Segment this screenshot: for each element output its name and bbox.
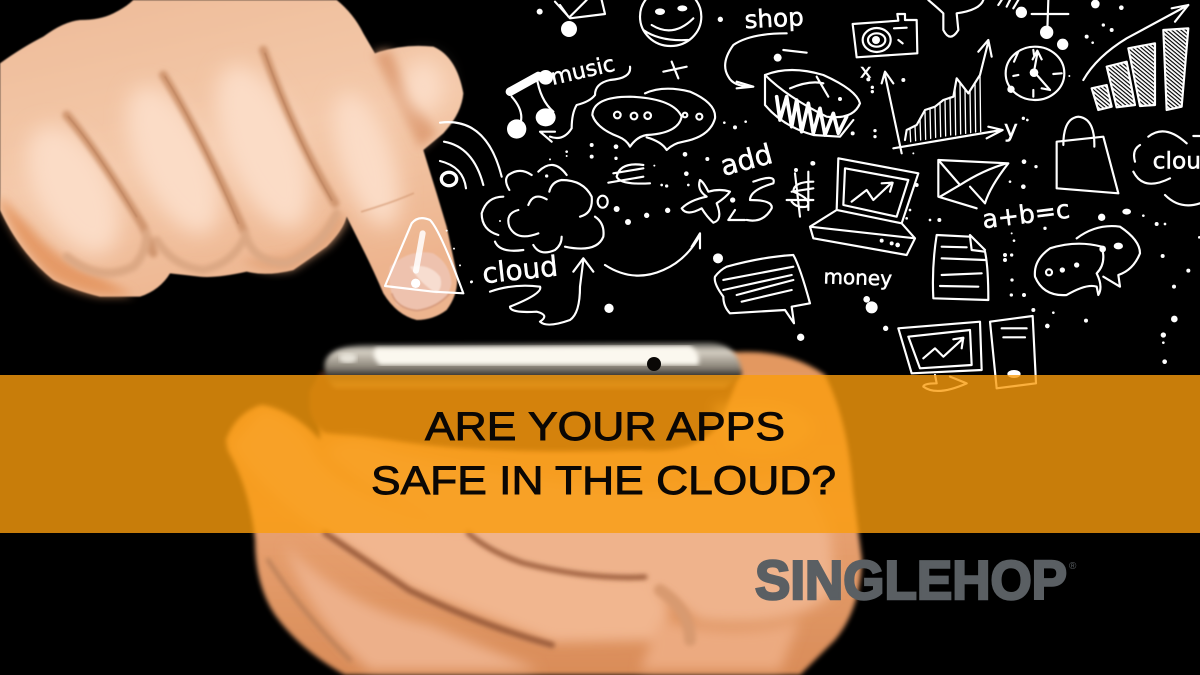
fingernail (389, 252, 452, 311)
doodle: add label: add (717, 137, 776, 183)
doodle: paired bubbles (1035, 226, 1140, 295)
doodle: wifi (440, 122, 502, 188)
doodle: music note (507, 67, 630, 142)
doodle: music label: music (548, 52, 617, 91)
doodle: money label: money (823, 264, 893, 291)
doodle: envelope (938, 160, 1008, 208)
doodle: monitor (898, 322, 982, 391)
doodle: smiley (640, 0, 723, 46)
skin shading: underside tone (0, 50, 437, 295)
doodle: squiggle and dollar (728, 172, 813, 221)
palm tone (232, 410, 835, 670)
skin shading: finger highlights (8, 53, 443, 269)
doodle: wiggle arrow (490, 258, 593, 325)
palm creases (268, 533, 690, 660)
finger highlight behind band (712, 401, 815, 454)
title: SAFE IN THE CLOUD? (371, 459, 836, 503)
phone back shadow (309, 372, 740, 451)
doodle: hatched bowl (765, 54, 860, 137)
phone edge (324, 342, 742, 388)
doodle: top marks and plus (998, 0, 1100, 50)
photo: hand holding phone (226, 342, 862, 675)
logo: SingleHop: SINGLEHOP (755, 549, 1067, 611)
doodle: equation: a+b=c (980, 194, 1071, 234)
doodle: speech bubble with lines (715, 255, 810, 323)
doodle: computer tower (990, 316, 1036, 388)
title: ARE YOUR APPS (425, 405, 785, 449)
logo: SingleHop: ® (1069, 561, 1077, 572)
doodle: plus shape (682, 180, 730, 223)
doodle: right cloud (1133, 131, 1200, 205)
doodle: scattered dots right (811, 5, 1200, 364)
doodle: shopping bag (1057, 117, 1118, 193)
doodle: clock (1006, 47, 1064, 100)
doodle: x label: x (860, 59, 871, 82)
doodle: mail with dot (537, 0, 605, 37)
doodle: camera (853, 14, 917, 57)
orange banner (0, 375, 1200, 533)
doodle: line chart (882, 40, 1003, 153)
doodle: cloud label: cloud (481, 250, 559, 290)
photo: pointing hand (0, 0, 463, 320)
doodle: scattered dots (470, 120, 815, 341)
doodle: y label: y (1004, 115, 1018, 143)
doodle: shop label: shop (744, 2, 804, 34)
doodle: euro (608, 164, 650, 184)
doodle: rising bar chart (1083, 5, 1188, 110)
doodles: left field (440, 0, 860, 341)
doodle: arrow to plus (605, 233, 700, 276)
doodle: document (933, 235, 988, 300)
doodles: right field (810, 0, 1200, 391)
skin shading: finger creases (67, 50, 337, 273)
doodle: chat bubbles (592, 62, 715, 150)
title (371, 405, 836, 503)
doodle: cloud (482, 165, 608, 252)
icon: warning triangle on fingertip (385, 218, 473, 293)
doodle: pin shape (928, 0, 983, 37)
doodle: laptop (810, 158, 918, 255)
doodle: curved arrow and shop tail (725, 33, 807, 88)
